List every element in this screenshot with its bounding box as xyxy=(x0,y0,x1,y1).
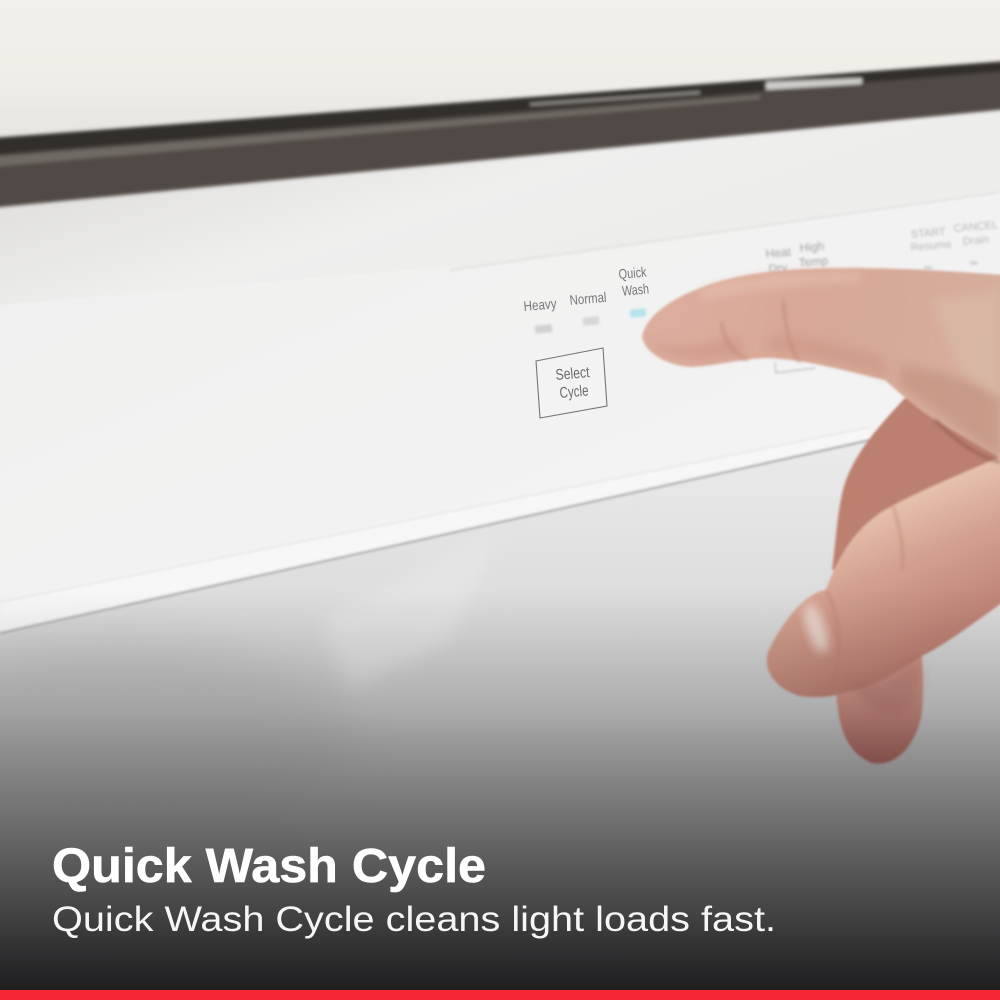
bottom red bar xyxy=(0,990,1000,1000)
blurred labels: START Resume, CANCEL Drain: Drain xyxy=(962,234,989,248)
blurred labels: Heat Dry, High Temp: Dry xyxy=(768,260,788,276)
indicator: Normal xyxy=(583,316,599,326)
partly hidden button xyxy=(775,362,815,373)
label: Quick Wash: Quick xyxy=(618,264,648,282)
finger shading xyxy=(648,272,1000,715)
middle finger behind xyxy=(832,398,1000,570)
label: Quick Wash: Wash xyxy=(621,280,650,299)
label: Quick Wash xyxy=(618,264,650,299)
lower door xyxy=(0,420,1000,1000)
title: Quick Wash Cycle xyxy=(52,840,486,893)
control panel face xyxy=(0,190,1000,640)
little finger tip xyxy=(836,650,923,764)
control panel labels xyxy=(523,219,999,418)
blurred labels: Heat Dry, High Temp: High xyxy=(799,239,825,255)
dark gradient overlay xyxy=(0,590,1000,990)
button: Select Cycle xyxy=(536,348,607,418)
blurred labels: Heat Dry, High Temp: Temp xyxy=(798,253,829,270)
label: Normal: Normal xyxy=(569,289,607,308)
blurred labels: START Resume, CANCEL Drain: START xyxy=(910,226,946,241)
blurred labels: Heat Dry, High Temp: Heat xyxy=(765,245,792,261)
dark door gap band xyxy=(0,60,1000,209)
panel lower trim xyxy=(0,425,870,633)
index finger and back of hand xyxy=(642,268,1000,470)
blurred reflection on door xyxy=(320,530,500,690)
nail highlight xyxy=(799,600,833,656)
indicator: Heavy xyxy=(535,324,552,334)
hand xyxy=(642,268,1000,764)
button: Select Cycle: Cycle xyxy=(559,383,589,402)
blurred labels: START Resume, CANCEL Drain: CANCEL xyxy=(953,219,999,235)
blurred labels: START Resume, CANCEL Drain xyxy=(910,219,999,270)
button: Select Cycle: Select xyxy=(555,364,591,384)
ring finger and thumb xyxy=(767,448,1000,697)
blurred labels: START Resume, CANCEL Drain: Resume xyxy=(910,238,952,254)
label: Heavy: Heavy xyxy=(523,295,557,314)
upper door face xyxy=(0,105,1000,340)
blurred labels: Heat Dry, High Temp xyxy=(765,239,829,276)
subtitle: Quick Wash Cycle cleans light loads fast. xyxy=(52,900,776,939)
countertop panel xyxy=(0,0,1000,150)
finger creases xyxy=(722,300,1000,696)
indicator: Quick Wash lit xyxy=(630,308,646,318)
